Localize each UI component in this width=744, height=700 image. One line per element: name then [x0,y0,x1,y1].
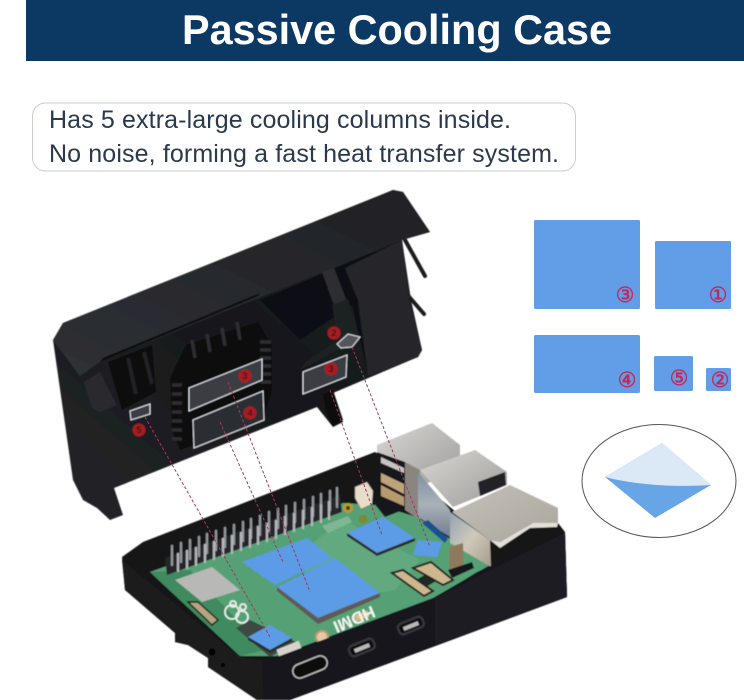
pad 5: ⑤ [670,367,688,390]
pad 4: ④ [618,369,636,392]
case silhouette [122,452,567,700]
pad outline 4 [193,391,264,448]
pad outline 2 [337,334,360,348]
pads on board [347,517,415,553]
dashed guide lines [145,347,430,637]
white connector [355,482,373,509]
title: Passive Cooling Case [182,6,612,53]
lid inner face [53,190,430,520]
thermal pad set [534,220,731,393]
silver chip [175,567,240,602]
header banner [26,0,744,61]
pad 1: ① [709,284,727,307]
ethernet jack [452,485,558,542]
right clip post [322,268,346,307]
lid bevel [53,190,430,376]
pad 3: ③ [616,284,634,307]
red number markers [132,326,340,436]
heatsink left column [108,345,156,410]
case base [122,423,567,700]
left clip [84,372,117,412]
USB-C port [291,654,329,680]
pad outline 3 centre [189,359,262,411]
pad 1 [655,241,731,309]
red number markers: 3 [328,364,334,374]
front wall [262,533,567,700]
board [150,503,490,656]
red number markers: 4 [247,408,253,418]
callout: peel-off pad detail [582,424,736,538]
pad 3 [534,220,640,309]
callout: cooling description [32,103,576,171]
pad 4 [534,335,640,393]
red number markers: 5 [136,425,142,435]
pad 5 [654,356,693,391]
callout: cooling description: No noise, forming a fast heat transfer system. [49,140,559,168]
callout: cooling description: Has 5 extra-large cooling columns inside. [49,106,511,134]
pad 2: ② [711,369,729,392]
case lid with heatsink columns [53,190,430,520]
pad outline 3 right [303,355,347,394]
lid clips [405,240,425,314]
pad outline 5 [130,404,150,420]
USB ports [377,423,558,578]
ribbon connectors [392,570,433,596]
micro HDMI port left [348,638,376,658]
raspberry logo [225,601,248,623]
red number markers: 2 [331,328,337,338]
micro HDMI port right [397,616,425,636]
board details [236,496,438,657]
heatsink centre column [170,322,272,450]
red number markers: 3 [242,371,248,381]
HDMI silkscreen text: HDMI [330,602,378,636]
GPIO header [165,488,342,575]
